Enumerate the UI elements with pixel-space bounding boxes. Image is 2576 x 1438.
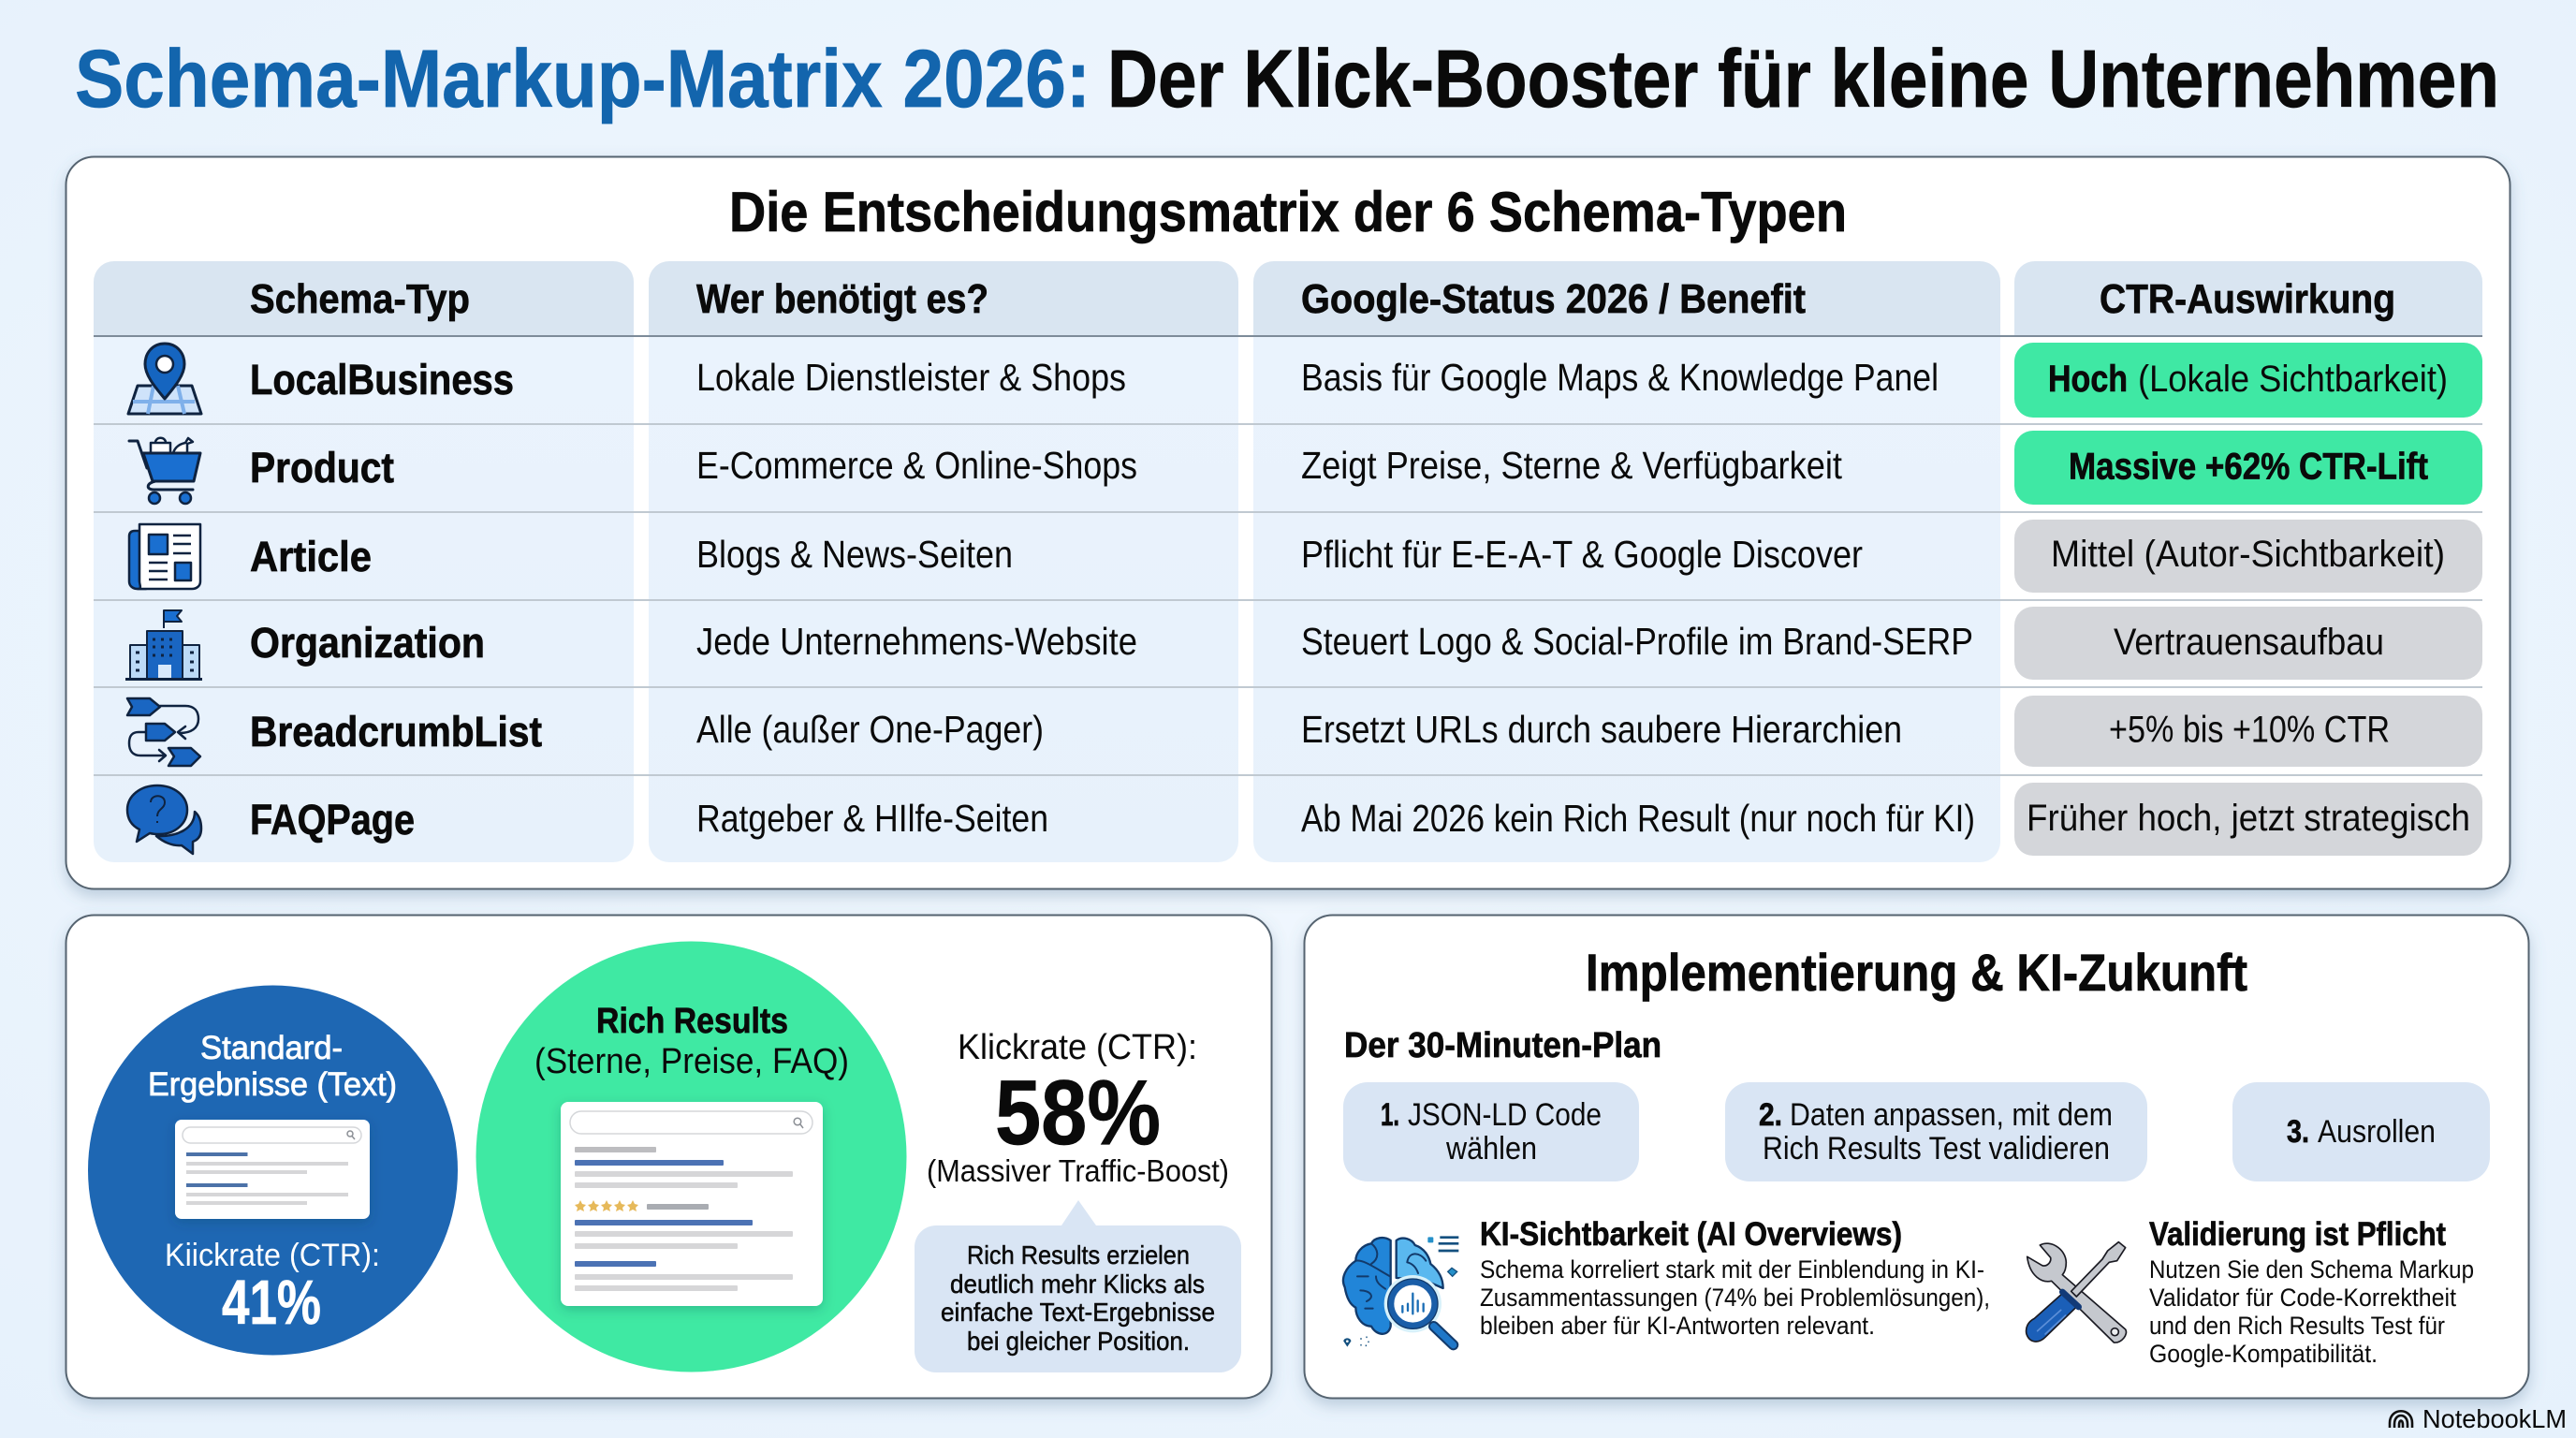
text: KI-Sichtbarkeit: Zusammentassungen (74% bei Problemlösungen), (1480, 1284, 1990, 1312)
step 2: Rich Results Test validieren (1763, 1131, 2110, 1167)
text: KI-Sichtbarkeit: KI-Sichtbarkeit (AI Overviews) (1480, 1216, 1902, 1253)
row: LocalBusiness (128, 343, 2482, 418)
badge: Früher hoch (2014, 783, 2482, 856)
circle: Standard-Ergebnisse: 41% (222, 1268, 321, 1338)
row: Product (129, 431, 2482, 505)
callout: Rich Results explanation: einfache Text-Ergebnisse (941, 1298, 1215, 1327)
table header row: Google-Status 2026 / Benefit (1301, 276, 1806, 322)
panel: Implementierung und KI-Zukunft (1305, 916, 2529, 1399)
step 2: Daten anpassen, mit dem (1790, 1097, 2113, 1133)
heading: matrix: Die Entscheidungsmatrix der 6 Schema-Typen (729, 181, 1847, 243)
text: KI-Sichtbarkeit (1480, 1216, 1990, 1340)
mockup: text results (175, 1120, 370, 1219)
callout: Rich Results explanation (915, 1200, 1241, 1372)
icon: speech bubbles (127, 785, 201, 854)
badge: +5% bis +10% CTR (2014, 696, 2482, 767)
step 3 (2232, 1082, 2490, 1181)
row: Article (129, 520, 2482, 593)
stat: 58% CTR: (Massiver Traffic-Boost) (927, 1153, 1229, 1188)
text: KI-Sichtbarkeit: Schema korreliert stark mit der Einblendung in KI- (1480, 1255, 1984, 1284)
row: Organization: Organization (250, 619, 485, 667)
stat: 58% CTR: 58% (995, 1061, 1161, 1164)
logo: NotebookLM: NotebookLM (2422, 1404, 2567, 1433)
row: Article: Pflicht für E-E-A-T & Google Discover (1301, 533, 1863, 576)
row: Product: Product (250, 444, 394, 492)
row: LocalBusiness: LocalBusiness (250, 356, 514, 404)
circle: Rich Results: (Sterne, Preise, FAQ) (534, 1042, 849, 1081)
stat: 58% CTR (927, 1028, 1229, 1188)
callout: Rich Results explanation: deutlich mehr Klicks als (950, 1269, 1205, 1299)
title (75, 34, 2499, 125)
text: Validierung: Nutzen Sie den Schema Markup (2149, 1255, 2474, 1284)
badge: Massive CTR-Lift: Massive +62% CTR-Lift (2069, 446, 2428, 487)
icon: office building (125, 610, 202, 680)
row: Organization: Steuert Logo & Social-Profile im Brand-SERP (1301, 620, 1973, 663)
circle: Rich Results (476, 942, 906, 1372)
stat: 58% CTR: Klickrate (CTR): (958, 1028, 1197, 1067)
badge: Massive CTR-Lift (2014, 431, 2482, 505)
text: Validierung: Validator für Code-Korrektheit (2149, 1284, 2456, 1312)
text: KI-Sichtbarkeit: bleiben aber für KI-Antworten relevant. (1480, 1312, 1875, 1340)
row: LocalBusiness: Basis für Google Maps & Knowledge Panel (1301, 356, 1939, 399)
callout: Rich Results explanation: Rich Results erzielen (967, 1240, 1190, 1269)
badge: Früher hoch: Früher hoch, jetzt strategisch (2027, 798, 2470, 839)
icon: wrench and screwdriver (2027, 1242, 2126, 1343)
badge: Mittel (2014, 520, 2482, 593)
badge: Hoch: Hoch (2048, 359, 2128, 400)
circle: Standard-Ergebnisse (88, 985, 458, 1356)
step 1 (1343, 1082, 1639, 1181)
table header row (250, 276, 2395, 322)
row: FAQPage (127, 783, 2482, 856)
circle: Standard-Ergebnisse: Ergebnisse (Text) (148, 1066, 397, 1103)
badge: +5% bis +10% CTR: +5% bis +10% CTR (2109, 710, 2390, 751)
row: Product: E-Commerce & Online-Shops (696, 444, 1137, 487)
title: Schema-Markup-Matrix 2026: (75, 34, 1090, 125)
row: Article: Blogs & News-Seiten (696, 533, 1013, 576)
step 3: 3. (2287, 1114, 2309, 1150)
step 1: wählen (1445, 1131, 1537, 1167)
row: Organization (125, 607, 2482, 680)
text: Validierung (2149, 1216, 2474, 1368)
step 2 (1725, 1082, 2147, 1181)
row: BreadcrumbList: Alle (außer One-Pager) (696, 708, 1044, 751)
rating stars (575, 1200, 638, 1211)
row: FAQPage: FAQPage (250, 796, 415, 844)
badge: Vertrauensaufbau: Vertrauensaufbau (2114, 622, 2384, 663)
step 2: 2. (1759, 1097, 1782, 1133)
row: BreadcrumbList: BreadcrumbList (250, 708, 542, 756)
icon: breadcrumb flow (127, 698, 200, 766)
icon: shopping cart (129, 438, 200, 504)
table header row: Schema-Typ (250, 276, 470, 322)
row: Article: Article (250, 533, 372, 580)
row: Organization: Jede Unternehmens-Website (696, 620, 1137, 663)
panel: Entscheidungsmatrix (66, 157, 2510, 889)
step 1: 1. (1381, 1097, 1399, 1133)
badge: Hoch: (Lokale Sichtbarkeit) (2138, 359, 2448, 400)
callout: Rich Results explanation: bei gleicher Position. (967, 1327, 1190, 1356)
table header row: CTR-Auswirkung (2100, 276, 2395, 322)
text: Validierung: Validierung ist Pflicht (2149, 1216, 2446, 1253)
badge: Hoch (2014, 343, 2482, 418)
text: Validierung: und den Rich Results Test für (2149, 1312, 2445, 1340)
circle: Standard-Ergebnisse: Standard- (200, 1030, 343, 1066)
row: FAQPage: Ratgeber & HIlfe-Seiten (696, 797, 1048, 840)
circle: Standard-Ergebnisse: Kiickrate (CTR): (165, 1238, 380, 1273)
step 3: Ausrollen (2318, 1114, 2436, 1150)
text: Validierung: Google-Kompatibilität. (2149, 1340, 2378, 1368)
step 1: JSON-LD Code (1408, 1097, 1602, 1133)
table header row: Wer benötigt es? (696, 276, 988, 322)
icon: map pin (128, 344, 201, 414)
row: Product: Zeigt Preise, Sterne & Verfügbarkeit (1301, 444, 1843, 487)
mockup: rich results (561, 1102, 823, 1306)
panel: CTR comparison (66, 916, 1271, 1399)
row: LocalBusiness: Lokale Dienstleister & Shops (696, 356, 1126, 399)
badge: Mittel: Mittel (Autor-Sichtbarkeit) (2051, 534, 2445, 575)
badge: Vertrauensaufbau (2014, 607, 2482, 680)
icon: newspaper (129, 524, 200, 589)
column backgrounds (94, 261, 2482, 862)
row: BreadcrumbList: Ersetzt URLs durch saubere Hierarchien (1301, 708, 1902, 751)
heading: Implementierung: Implementierung & KI-Zukunft (1586, 943, 2247, 1002)
icon: brain with magnifier (1343, 1237, 1458, 1347)
row: BreadcrumbList (127, 696, 2482, 767)
row: FAQPage: Ab Mai 2026 kein Rich Result (nur noch für KI) (1301, 797, 1975, 840)
circle: Rich Results: Rich Results (596, 1002, 788, 1041)
subheading: 30-Minuten-Plan: Der 30-Minuten-Plan (1344, 1026, 1661, 1065)
